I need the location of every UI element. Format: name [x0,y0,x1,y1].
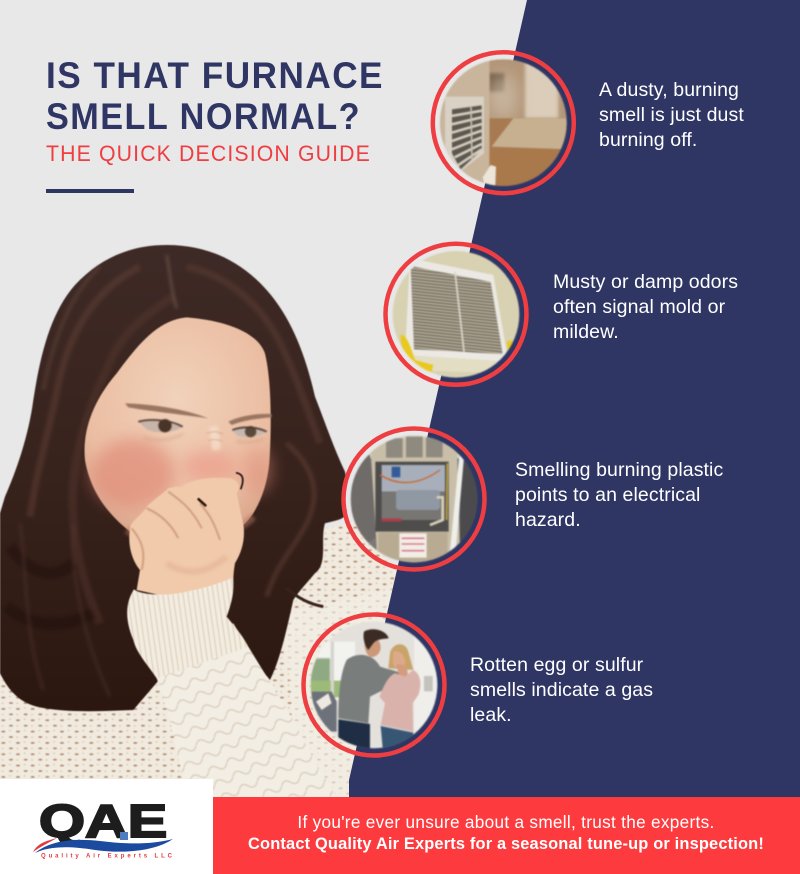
photo: woman covering her nose [0,245,433,797]
fingernail shadow [236,473,243,489]
hair [0,245,347,711]
right eyebrow [228,414,272,425]
callout text: If you're ever unsure about a smell, trust the experts. [297,812,715,832]
text: dusty smell: burning off. [599,129,697,151]
logo tagline: Quality Air Experts LLC [41,854,173,860]
heading: subtitle: THE QUICK DECISION GUIDE [46,141,371,166]
heading: main title: SMELL NORMAL? [46,95,361,137]
ring 3 [344,428,484,570]
text: burning plastic: hazard. [515,509,581,531]
sweater body [0,522,433,797]
photo circle 1: dusty floor vent [437,57,570,190]
footer: call to action bar [213,797,800,874]
title underline [46,189,134,193]
text: rotten egg: Rotten egg or sulfur [470,654,644,676]
footer: logo panel [0,779,213,874]
face [85,317,272,541]
callout text: Contact Quality Air Experts for a seasonal tune-up or inspection! [248,835,764,853]
text: burning plastic: Smelling burning plastic [515,459,723,481]
photo circle 3: open furnace [347,433,483,567]
logo wordmark: QAE [39,796,167,847]
left eyebrow [125,403,208,418]
right eye [232,426,267,437]
photo circle 2: dirty wall grille [390,250,523,383]
heading: main title [46,54,384,137]
text: musty odors: often signal mold or [553,296,726,318]
heading: main title: IS THAT FURNACE [46,54,384,96]
man [338,629,402,748]
woman [379,644,420,748]
text: dusty smell: A dusty, burning [599,79,739,101]
panel: navy diagonal background [349,0,800,797]
left eye [138,419,183,432]
text: burning plastic: points to an electrical [515,484,700,506]
text: musty odors: mildew. [553,321,619,343]
text: musty odors: Musty or damp odors [553,271,738,293]
ring 1 [433,52,574,193]
hand [129,473,244,597]
ring 2 [386,244,526,385]
photo circle 4: couple smelling gas [307,620,444,753]
ring 4 [304,614,444,756]
text: dusty smell: smell is just dust [599,104,744,126]
text: rotten egg: leak. [470,704,512,726]
text: rotten egg: smells indicate a gas [470,679,653,701]
sleeve cuff [127,578,333,797]
logo swoosh [33,832,173,853]
